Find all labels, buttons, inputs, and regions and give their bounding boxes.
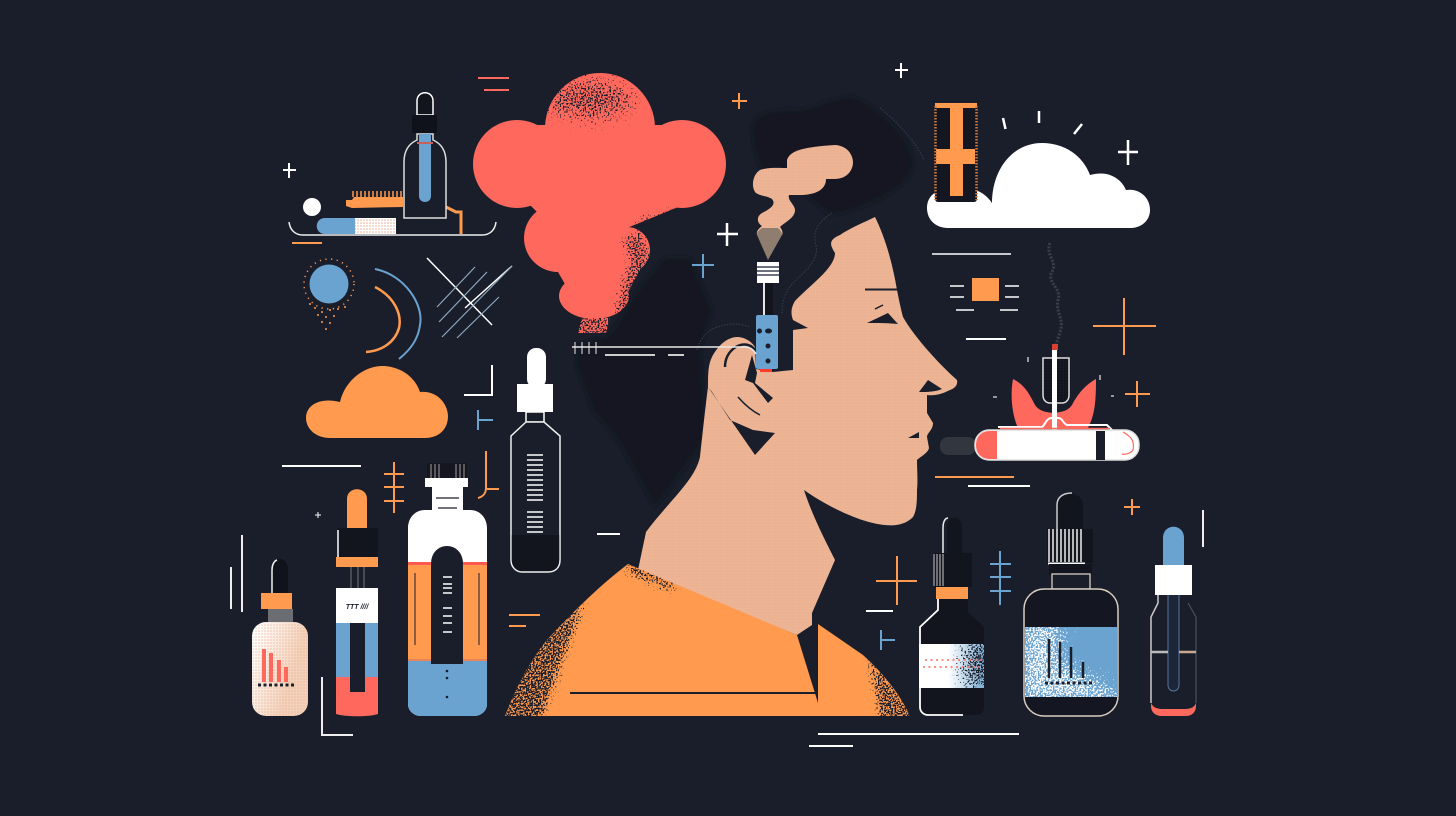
large white bottle [408, 463, 487, 716]
reclining figure on tray [289, 191, 496, 243]
right blue dropper vial [1151, 527, 1196, 716]
orange shirt [505, 564, 910, 716]
small cream bottle [252, 559, 308, 716]
cloud base speckle [578, 318, 610, 333]
hair back of head [577, 258, 712, 507]
tall orange dropper vial: TTT //// [346, 604, 369, 611]
head and neck [638, 217, 957, 635]
thin pipe line across hair [572, 342, 756, 355]
center dropper bottle [511, 348, 560, 572]
orange plus lines [809, 298, 1203, 746]
ear [708, 344, 775, 455]
sparkle plus marks [283, 63, 908, 278]
rising smoke [1049, 243, 1061, 350]
right large dropper bottle [1020, 493, 1120, 716]
nostril and mouth [908, 380, 942, 438]
beige smoke near head [753, 145, 853, 260]
right dark bottle with label [919, 517, 984, 716]
orange cloud [306, 366, 448, 438]
crescent arcs [366, 269, 421, 359]
hair outline dotted [697, 108, 924, 350]
cloud lower stipple [612, 205, 680, 325]
crossed lines [427, 258, 512, 338]
small brackets and marks left [231, 365, 620, 735]
cloud top stipple [545, 80, 635, 120]
flaming cigarette device [940, 344, 1139, 460]
hanging white cloud with orange block [927, 103, 1150, 228]
orange square with lines [932, 254, 1019, 339]
vape device on head [756, 262, 779, 372]
hair top [752, 97, 913, 215]
dropper bottle top left [404, 93, 446, 218]
red smoke cloud [473, 73, 726, 342]
blue sun with dots [304, 259, 354, 330]
tall orange dropper vial [336, 489, 378, 716]
eye and brow [865, 290, 898, 324]
shirt stipple and collar line [505, 565, 910, 716]
